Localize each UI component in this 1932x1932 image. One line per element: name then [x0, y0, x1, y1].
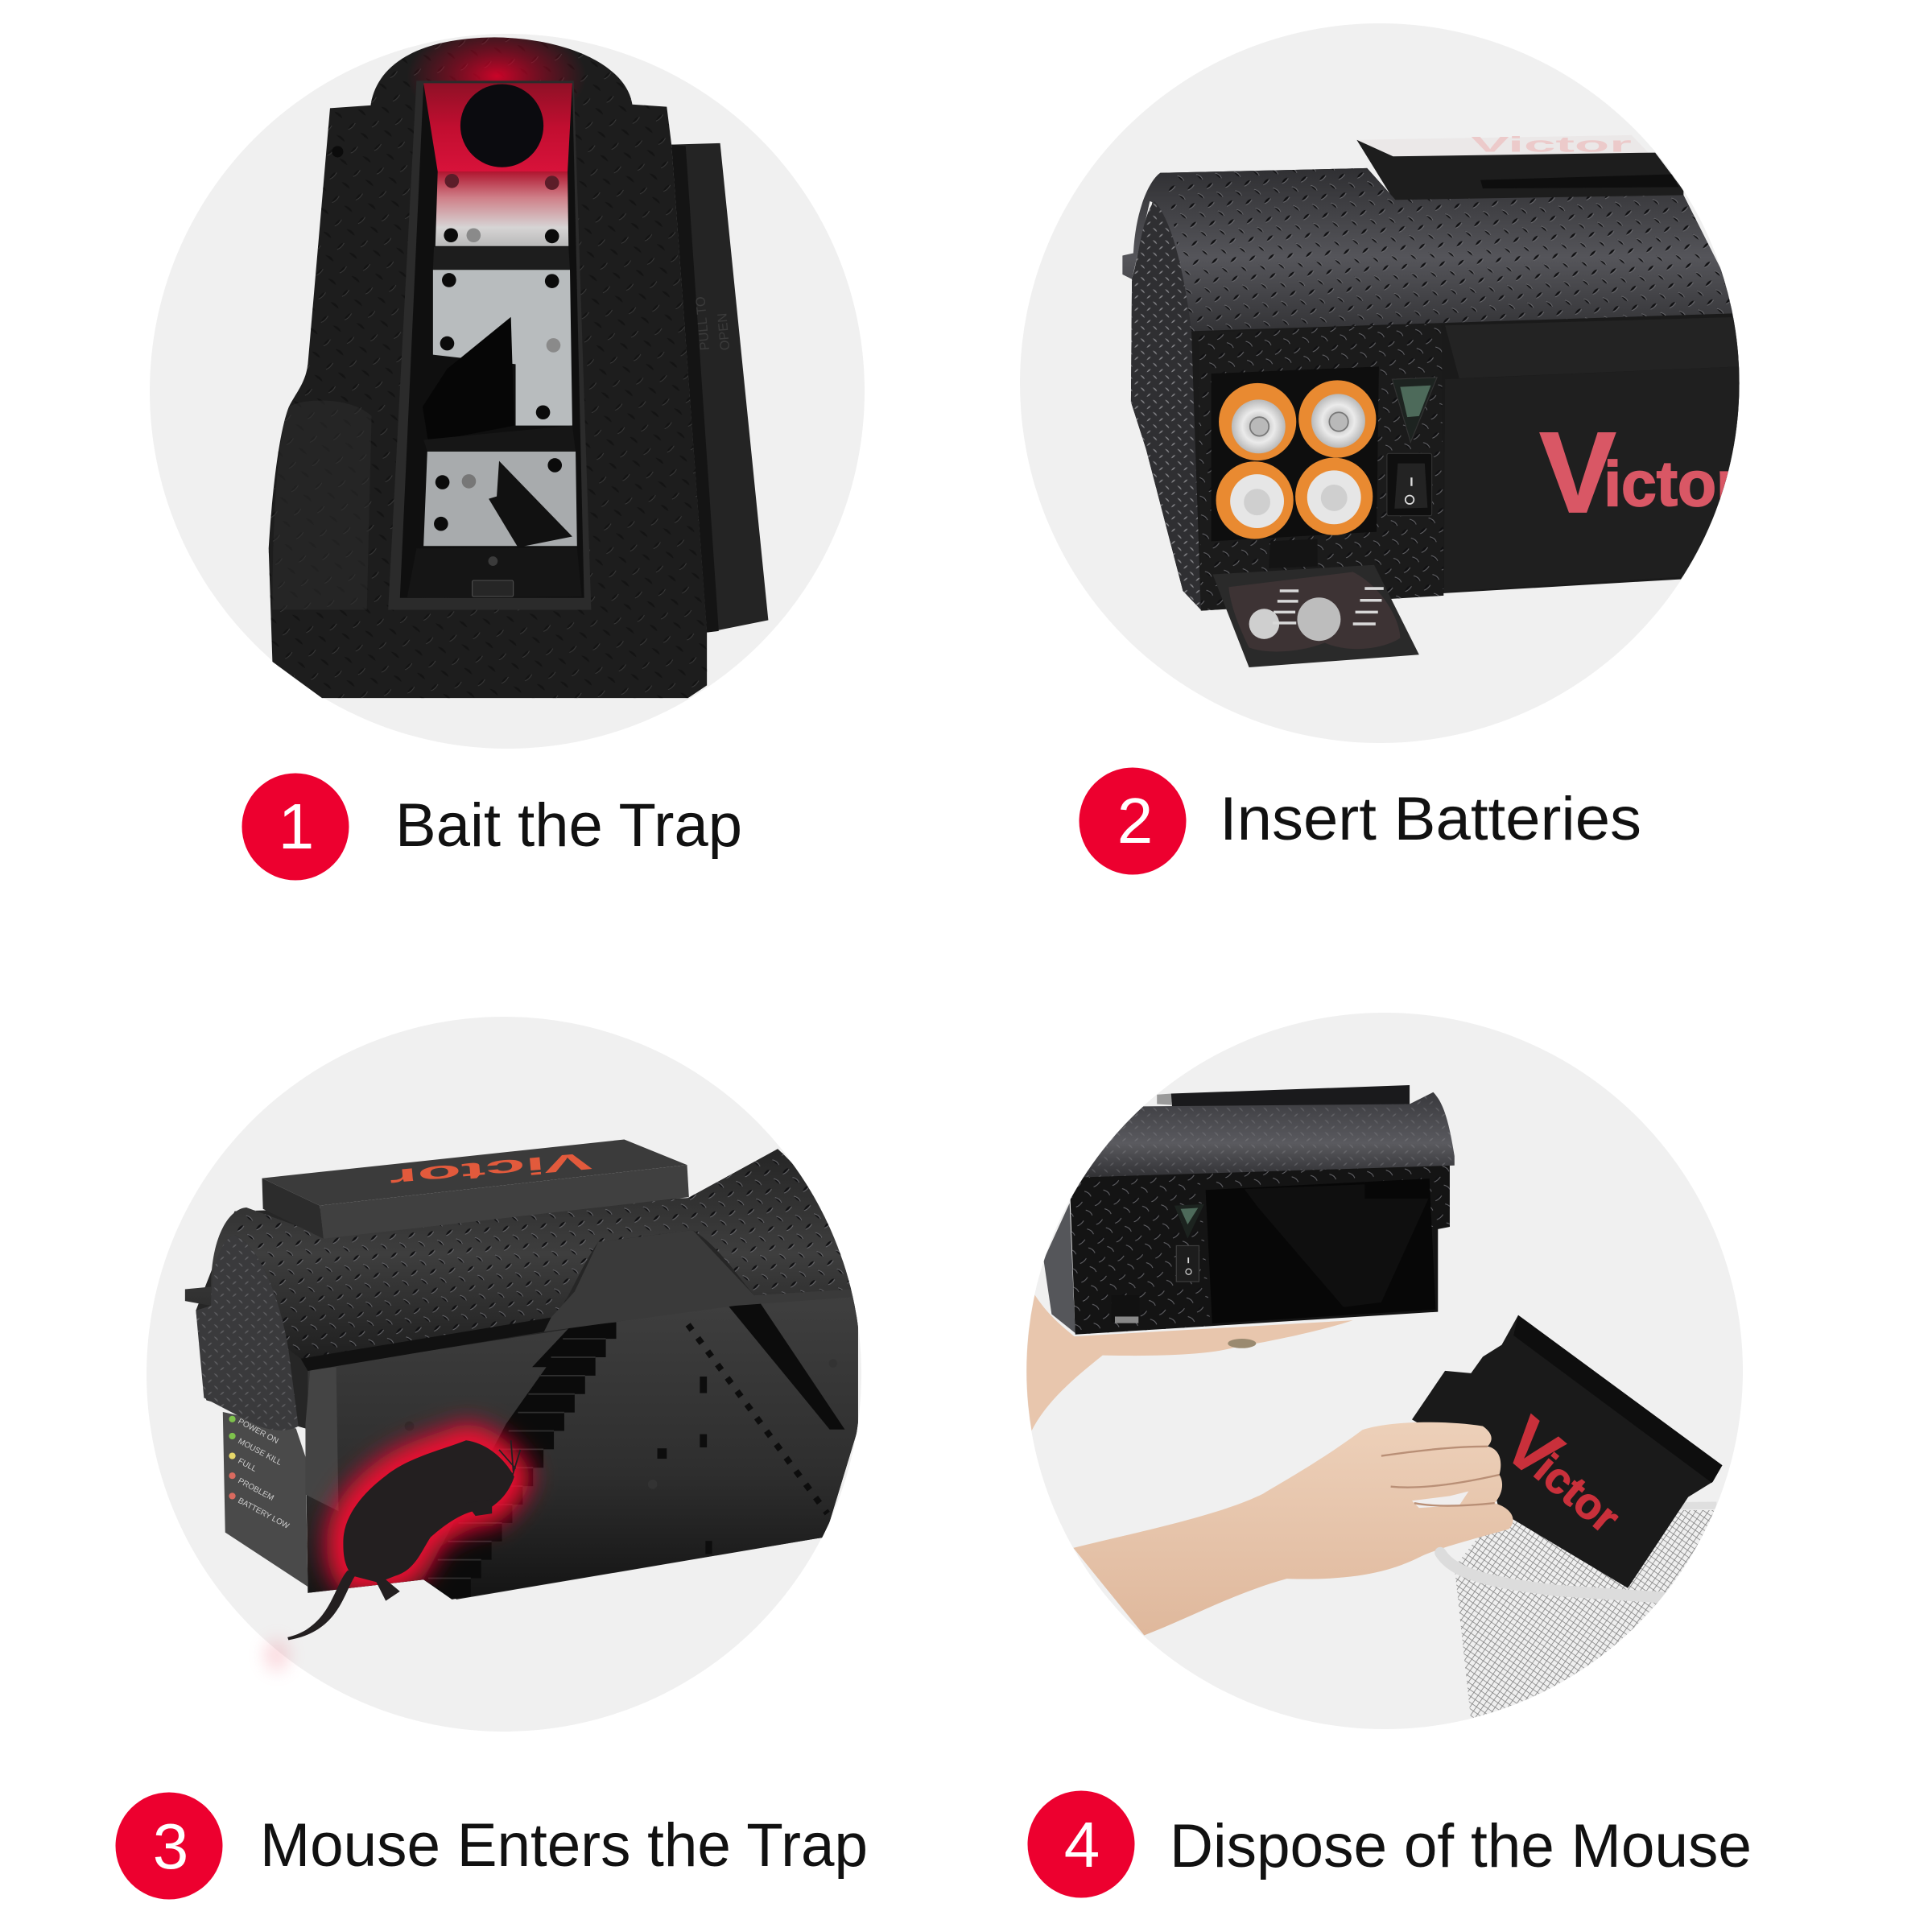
right box lower [1682, 367, 1740, 576]
battery bottom right [1295, 458, 1373, 535]
information label: MOUSE KILL [237, 1437, 283, 1468]
dark stairs [423, 1323, 616, 1599]
lid Victor logo: Victor [388, 1147, 593, 1191]
metal plate middle [433, 270, 572, 426]
indicator and switch [1174, 1204, 1204, 1282]
end cap texture [196, 1235, 299, 1430]
end cap perforated [196, 1235, 299, 1430]
body texture [269, 37, 707, 698]
black diagonal beam [729, 1301, 844, 1430]
panel: step 4 caption [1027, 1790, 1752, 1898]
side drawer bar: PULL TO [693, 296, 712, 351]
rear lip and tab [407, 547, 582, 598]
battery bottom left [1216, 461, 1294, 539]
side drawer bar: OPEN [715, 312, 733, 351]
illustration: trap viewed from above [269, 24, 768, 698]
dome texture [234, 1149, 851, 1359]
drawer inner lip [1513, 1315, 1722, 1483]
killing plate wedge upper [423, 317, 514, 442]
label: Insert Batteries: Insert Batteries [1220, 785, 1641, 853]
floor band [423, 426, 576, 452]
side drawer bar [671, 143, 768, 633]
panel: step 4 dispose of the mouse [1025, 1013, 1743, 1729]
number badge 4: 4 [1064, 1809, 1100, 1880]
inner cavity frame [388, 80, 591, 609]
battery door [1212, 565, 1419, 667]
battery door latch [1111, 1295, 1139, 1323]
finger gaps [1381, 1447, 1500, 1506]
label: Dispose of the Mouse: Dispose of the Mouse [1170, 1812, 1752, 1880]
silhouette backing [196, 1149, 858, 1600]
lid left side [262, 1179, 324, 1239]
corner bracket [305, 1367, 339, 1511]
trap body [269, 37, 707, 698]
trap opening [1206, 1179, 1435, 1323]
power switch [1387, 453, 1432, 516]
dome texture [1084, 1092, 1455, 1177]
Victor logo: V [1539, 409, 1616, 537]
lid front [320, 1165, 689, 1239]
front panel texture [1198, 324, 1443, 611]
faint red smudge [264, 1639, 290, 1671]
metal plate top [436, 171, 568, 246]
metal plate bottom [423, 452, 577, 546]
number badge 4 [1027, 1790, 1135, 1898]
divider bar [433, 247, 570, 270]
Victor logo on tray: ictor [1525, 1445, 1629, 1542]
information label [223, 1412, 308, 1587]
illustration: hands emptying trap [1025, 1085, 1722, 1723]
illustration: cutaway trap with mouse [185, 1139, 858, 1640]
hinge [1269, 539, 1318, 568]
information label: PROBLEM [237, 1476, 275, 1503]
photo circle 3 [147, 1017, 861, 1732]
dome body [1122, 168, 1740, 331]
trap upper strip texture [1199, 1163, 1450, 1227]
lid text: Victor [1471, 132, 1633, 156]
screws [332, 146, 562, 530]
end face perforated [1131, 201, 1201, 609]
number badge 3: 3 [153, 1810, 188, 1882]
ring [1228, 1339, 1256, 1348]
label: Bait the Trap: Bait the Trap [395, 791, 742, 860]
number badge 3 [116, 1792, 222, 1900]
Victor logo: ictor [1604, 448, 1741, 519]
square slots [405, 1359, 837, 1554]
trap front [1070, 1163, 1450, 1335]
panel: step 2 caption [1079, 768, 1641, 874]
battery bay [1212, 366, 1379, 541]
information label: BATTERY LOW [237, 1496, 291, 1531]
photo circle 2 [1020, 23, 1740, 743]
mouse silhouette [287, 1440, 520, 1640]
gap between thumb and fingers [1412, 1492, 1468, 1508]
front panel [1201, 592, 1444, 611]
panel: step 1 caption [242, 773, 742, 881]
dome [1084, 1092, 1455, 1177]
trap side [1043, 1203, 1075, 1333]
number badge 2 [1079, 768, 1187, 874]
mouse red glow [343, 1440, 514, 1577]
panel: step 1 bait the trap [150, 24, 865, 749]
round entrance hole [460, 85, 543, 167]
panel: step 2 insert batteries [1020, 23, 1741, 743]
rim [301, 1318, 551, 1371]
right box upper [1445, 317, 1740, 378]
lid bar [1157, 1085, 1410, 1113]
panel: step 3 mouse enters the trap [147, 1017, 861, 1732]
left shoulder [272, 400, 372, 609]
body backing [1131, 168, 1740, 611]
cavity [400, 85, 584, 598]
dome [185, 1149, 851, 1359]
photo circle 1 [150, 34, 865, 749]
number badge 1: 1 [279, 791, 314, 862]
dome texture [1164, 168, 1740, 331]
interior stairs [1245, 1184, 1429, 1307]
Victor logo on tray: V [1489, 1402, 1577, 1493]
holding hand [1025, 1286, 1353, 1432]
number badge 2: 2 [1117, 785, 1153, 857]
basket front rim [1440, 1553, 1662, 1598]
drawer tray [1412, 1315, 1722, 1588]
notch panel [544, 1230, 851, 1331]
battery top left [1219, 383, 1296, 460]
lid top face [262, 1139, 687, 1206]
information label: FULL [237, 1457, 258, 1474]
red glow on dome [412, 37, 582, 95]
lid top face [1356, 135, 1683, 189]
body side wall [308, 1285, 858, 1600]
label: Mouse Enters the Trap: Mouse Enters the Trap [260, 1811, 868, 1880]
waste basket mesh [1455, 1510, 1716, 1723]
killing plate wedge lower [489, 461, 572, 547]
photo circle 4 [1026, 1013, 1743, 1729]
number badge 1 [242, 773, 349, 881]
waste basket back rim [1500, 1505, 1716, 1508]
sawtooth edge [688, 1324, 828, 1513]
lid front [1356, 140, 1683, 203]
end face texture [1131, 201, 1201, 609]
lid rail [1480, 175, 1678, 188]
status indicator triangle [1392, 378, 1437, 442]
illustration: battery compartment [1122, 132, 1741, 667]
information label: POWER ON [237, 1417, 280, 1446]
red end wall [423, 83, 572, 171]
panel: step 3 caption [116, 1792, 868, 1900]
battery top right [1298, 380, 1376, 458]
emptying hand and arm [1073, 1422, 1513, 1635]
trap front texture [1070, 1173, 1210, 1335]
